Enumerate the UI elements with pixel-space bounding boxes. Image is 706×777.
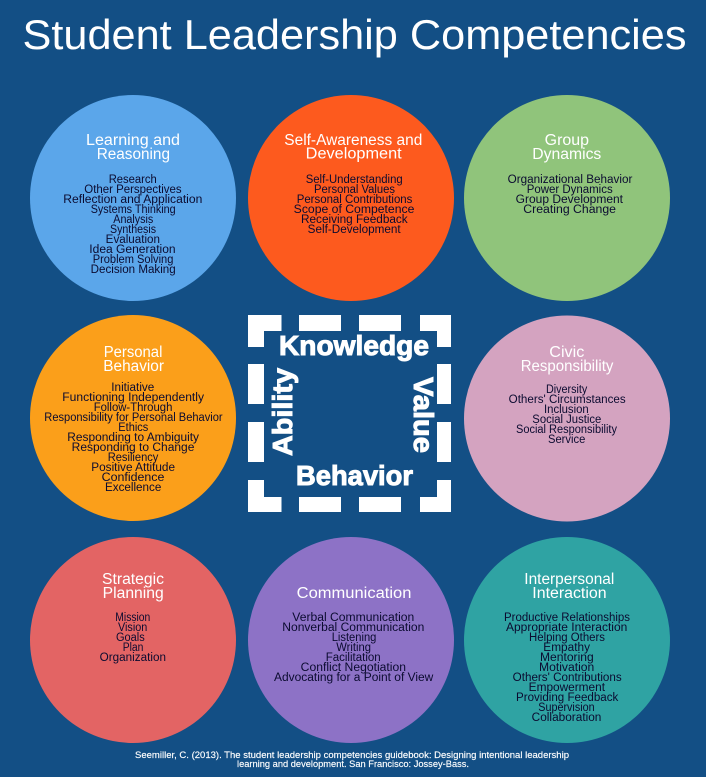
panel: strategic planning: Organization bbox=[100, 652, 166, 664]
panel: learning and reasoning: Analysis bbox=[113, 214, 154, 226]
panel: learning and reasoning: Learning and bbox=[86, 132, 180, 149]
panel: civic responsibility: Inclusion bbox=[544, 404, 589, 416]
panel: learning and reasoning: Research bbox=[109, 174, 157, 186]
panel: civic responsibility: Social Justice bbox=[532, 414, 601, 426]
panel: personal behavior: Responding to Change bbox=[72, 442, 194, 454]
panel: interpersonal interaction: Collaboration bbox=[532, 712, 601, 724]
panel: personal behavior: Excellence bbox=[105, 482, 161, 494]
panel: interpersonal interaction: Providing Feedback bbox=[516, 692, 619, 704]
panel: self-awareness and development bbox=[248, 95, 454, 301]
panel: interpersonal interaction: Supervision bbox=[538, 702, 595, 714]
panel: communication: Communication bbox=[297, 585, 411, 602]
panel: personal behavior: Responsibility for Personal Behavior bbox=[44, 412, 223, 424]
panel: learning and reasoning: Decision Making bbox=[91, 264, 176, 276]
panel: personal behavior bbox=[30, 315, 236, 521]
panel: interpersonal interaction: Productive Relationships bbox=[504, 612, 630, 624]
panel: interpersonal interaction: Empathy bbox=[543, 642, 590, 654]
panel: civic responsibility: Service bbox=[548, 434, 585, 446]
panel: strategic planning: Plan bbox=[123, 642, 143, 654]
panel: group dynamics: Power Dynamics bbox=[527, 184, 613, 196]
panel: communication: Advocating for a Point of View bbox=[274, 672, 434, 684]
citation: learning and development. San Francisco: Jossey-Bass. bbox=[237, 759, 469, 770]
panel: personal behavior: Follow-Through bbox=[94, 402, 172, 414]
panel: strategic planning: Goals bbox=[116, 632, 145, 644]
panel: self-awareness and development: Receiving Feedback bbox=[301, 214, 408, 226]
panel: group dynamics: Organizational Behavior bbox=[508, 174, 633, 186]
panel: learning and reasoning: Evaluation bbox=[106, 234, 160, 246]
panel: personal behavior: Confidence bbox=[102, 472, 164, 484]
panel: group dynamics bbox=[464, 95, 670, 301]
panel: group dynamics: Group bbox=[545, 132, 589, 149]
panel: communication: Listening bbox=[332, 632, 376, 644]
panel: civic responsibility: Civic bbox=[549, 344, 585, 361]
panel: interpersonal interaction: Interaction bbox=[532, 585, 607, 602]
panel: learning and reasoning: Other Perspectives bbox=[84, 184, 182, 196]
panel: strategic planning: Planning bbox=[103, 585, 164, 602]
panel: civic responsibility: Social Responsibility bbox=[516, 424, 617, 436]
panel: self-awareness and development: Personal Contributions bbox=[297, 194, 413, 206]
heading: value: Value bbox=[408, 377, 439, 453]
citation: Seemiller, C. (2013). The student leadership competencies guidebook: Designing intentional leadership bbox=[135, 750, 569, 761]
panel: group dynamics: Creating Change bbox=[523, 204, 616, 216]
panel: personal behavior: Ethics bbox=[118, 422, 149, 434]
panel: personal behavior: Behavior bbox=[103, 358, 164, 375]
panel: personal behavior: Initiative bbox=[111, 382, 154, 394]
panel: learning and reasoning: Reasoning bbox=[97, 146, 170, 163]
panel: strategic planning bbox=[30, 537, 236, 743]
panel: communication: Nonverbal Communication bbox=[282, 622, 424, 634]
panel: communication: Verbal Communication bbox=[292, 612, 414, 624]
panel: personal behavior: Personal bbox=[104, 344, 162, 361]
panel: interpersonal interaction: Motivation bbox=[539, 662, 594, 674]
panel: personal behavior: Responding to Ambiguity bbox=[67, 432, 199, 444]
panel: personal behavior: Functioning Independently bbox=[62, 392, 204, 404]
panel: communication: Conflict Negotiation bbox=[301, 662, 406, 674]
panel: interpersonal interaction: Others' Contributions bbox=[513, 672, 622, 684]
panel: interpersonal interaction: Interpersonal bbox=[524, 571, 614, 588]
panel: self-awareness and development: Self-Awareness and bbox=[284, 132, 422, 149]
panel: civic responsibility: Responsibility bbox=[521, 358, 614, 375]
panel: personal behavior: Positive Attitude bbox=[91, 462, 175, 474]
panel: group dynamics: Group Development bbox=[516, 194, 624, 206]
panel: learning and reasoning: Synthesis bbox=[110, 224, 156, 236]
panel: interpersonal interaction bbox=[464, 537, 670, 743]
panel: civic responsibility bbox=[464, 316, 670, 522]
heading: behavior: Behavior bbox=[296, 460, 413, 491]
heading: ability: Ability bbox=[267, 368, 298, 456]
panel: learning and reasoning: Reflection and Application bbox=[63, 194, 202, 206]
panel: learning and reasoning: Problem Solving bbox=[93, 254, 173, 266]
panel: learning and reasoning: Idea Generation bbox=[89, 244, 176, 256]
heading: knowledge: Knowledge bbox=[279, 330, 429, 361]
panel: communication: Writing bbox=[336, 642, 371, 654]
panel: interpersonal interaction: Mentoring bbox=[540, 652, 594, 664]
panel: self-awareness and development: Development bbox=[306, 146, 402, 162]
panel: strategic planning: Vision bbox=[118, 622, 147, 634]
panel: interpersonal interaction: Helping Others bbox=[529, 632, 605, 644]
panel: self-awareness and development: Self-Development bbox=[308, 224, 402, 236]
panel: strategic planning: Mission bbox=[115, 612, 150, 624]
panel: learning and reasoning bbox=[30, 95, 236, 301]
panel: civic responsibility: Diversity bbox=[546, 384, 588, 396]
citation bbox=[135, 750, 569, 770]
panel: interpersonal interaction: Empowerment bbox=[529, 682, 606, 694]
panel: group dynamics: Dynamics bbox=[532, 146, 602, 163]
icon: dashed square frame bbox=[248, 315, 451, 512]
panel: interpersonal interaction: Appropriate Interaction bbox=[506, 622, 627, 634]
panel: self-awareness and development: Scope of Competence bbox=[294, 204, 414, 216]
panel: civic responsibility: Others' Circumstances bbox=[509, 394, 626, 406]
panel: learning and reasoning: Systems Thinking bbox=[91, 204, 176, 216]
panel: communication: Facilitation bbox=[326, 652, 381, 664]
title: Student Leadership Competencies bbox=[22, 11, 687, 58]
panel: self-awareness and development: Self-Understanding bbox=[306, 174, 403, 186]
panel: strategic planning: Strategic bbox=[102, 571, 164, 588]
panel: communication bbox=[248, 537, 454, 743]
panel: personal behavior: Resiliency bbox=[108, 452, 159, 464]
panel: self-awareness and development: Personal Values bbox=[314, 184, 395, 196]
